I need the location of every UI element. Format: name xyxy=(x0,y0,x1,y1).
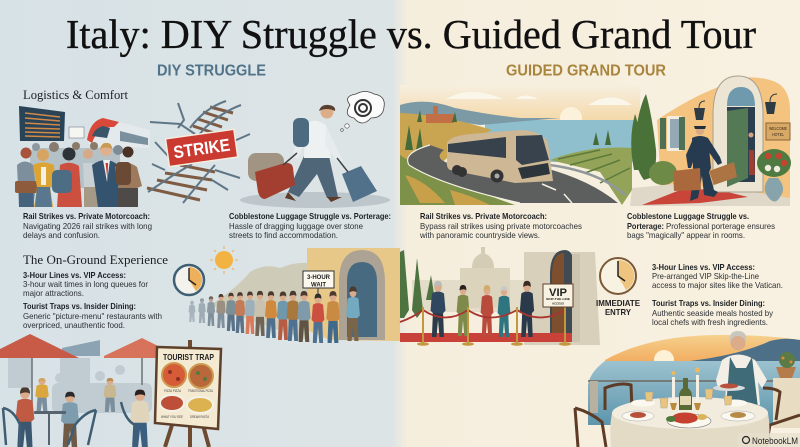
cafe ghost background xyxy=(8,358,152,413)
text block: lines (DIY) xyxy=(23,271,148,298)
text block: lines (DIY): 3-hour wait times in long queues for xyxy=(23,280,148,289)
red carpet xyxy=(642,189,748,205)
food photos xyxy=(160,363,213,413)
cypress trees xyxy=(400,250,435,318)
sign: VIP xyxy=(543,284,573,307)
text block: lines (DIY): major attractions. xyxy=(23,289,84,298)
cafe chairs xyxy=(3,402,135,445)
text block: dining (DIY): Tourist Traps vs. Insider Dining: xyxy=(23,302,136,311)
text block: luggage (DIY): streets to find accommodation. xyxy=(229,231,338,240)
text block: luggage (guided): Cobblestone Luggage Struggle vs. xyxy=(627,212,749,221)
illustration: coach on coastal road xyxy=(400,85,640,205)
luggage: blue suitcase xyxy=(337,158,377,202)
text block: dining (DIY) xyxy=(23,302,162,330)
sea xyxy=(485,120,635,162)
foreground golden leaves xyxy=(405,175,490,205)
umbrellas xyxy=(0,334,170,410)
heading: DIY Struggle: DIY STRUGGLE xyxy=(157,62,266,80)
text block: rail strikes (guided): Bypass rail strikes using private motorcoaches xyxy=(420,222,582,231)
basilica xyxy=(412,247,524,312)
stone entrance xyxy=(524,250,600,345)
icon: immediate entry clock xyxy=(600,258,636,294)
sign: 3-hour wait: 3-HOUR xyxy=(307,274,331,281)
terrace rail xyxy=(588,380,800,382)
background crowd xyxy=(30,142,123,188)
icon: train xyxy=(87,118,150,148)
velvet rope and stanchions xyxy=(400,307,571,346)
road xyxy=(408,145,618,203)
traveller: man in grey xyxy=(83,149,99,207)
cypress row xyxy=(405,110,611,150)
section heading: Logistics and Comfort: Logistics & Comfort xyxy=(23,88,129,102)
icon: sun xyxy=(210,246,238,274)
village xyxy=(426,106,454,123)
sea xyxy=(588,361,800,425)
thought bubble: tangled confusion xyxy=(341,92,384,131)
text block: rail strikes (guided): with panoramic countryside views. xyxy=(419,231,540,240)
coach xyxy=(447,130,553,183)
place settings xyxy=(622,400,755,421)
text block: dining (guided) xyxy=(652,299,774,327)
title: Italy: DIY Struggle vs. Guided Grand Tour xyxy=(66,11,756,57)
label: immediate entry: ENTRY xyxy=(605,307,631,317)
text block: rail strikes (guided) xyxy=(419,212,582,240)
text block: lines (DIY): 3-Hour Lines vs. VIP Access: xyxy=(23,271,126,280)
label: immediate entry xyxy=(596,298,640,317)
sign: tourist trap menu xyxy=(155,347,221,429)
planter pillar xyxy=(773,352,800,428)
arched door xyxy=(339,250,385,340)
traveller: man with brown backpack xyxy=(115,146,142,207)
NotebookLM badge xyxy=(738,433,800,447)
text block: lines (guided) xyxy=(652,263,783,290)
golden fields xyxy=(400,113,492,205)
text block: luggage (guided): Porterage: xyxy=(627,222,664,231)
traveller: man with bag xyxy=(15,148,37,207)
icon: departure board xyxy=(19,106,65,141)
cypress trees xyxy=(631,94,656,180)
vineyard hillside xyxy=(550,148,632,205)
illustration: VIP skip-the-line entry xyxy=(400,247,600,346)
text block: luggage (DIY): Hassle of dragging luggage over stone xyxy=(229,222,363,231)
traveller: woman in red with backpack xyxy=(52,148,82,207)
text block: rail strikes (guided): Rail Strikes vs. Private Motorcoach: xyxy=(420,212,547,221)
luggage: red suitcase and bag xyxy=(248,153,297,199)
paved ground xyxy=(630,184,790,206)
illustration: hotel porter xyxy=(630,76,791,206)
red carpet xyxy=(400,333,572,342)
sky sun and clouds xyxy=(446,92,632,129)
text block: luggage (DIY): Cobblestone Luggage Struggle vs. Porterage: xyxy=(229,212,391,221)
text block: luggage (guided): Professional porterage ensures xyxy=(666,222,775,231)
traveller xyxy=(285,105,343,202)
hillside xyxy=(210,263,307,340)
sign: 3-hour wait: WAIT xyxy=(311,282,326,288)
wine bottle xyxy=(679,378,692,410)
sign: tourist trap menu: PIZZA PIZZA xyxy=(164,389,182,393)
sign: welcome hotel xyxy=(766,123,790,140)
text block: lines (guided): access to major sites like the Vatican. xyxy=(652,281,783,290)
wine glasses xyxy=(645,389,732,408)
porter with suitcases xyxy=(673,126,737,201)
door arch xyxy=(713,76,763,192)
tour group xyxy=(430,281,534,337)
text block: rail strikes (DIY): Rail Strikes vs. Private Motorcoach: xyxy=(23,212,150,221)
illustration: seaside dining with chef xyxy=(575,331,800,447)
icon: wait clock xyxy=(174,265,204,295)
illustration: broken rail tracks with strike sign xyxy=(147,101,250,203)
table cloth skirt xyxy=(610,413,770,447)
peach sky xyxy=(400,85,640,123)
text block: dining (guided): Tourist Traps vs. Insider Dining: xyxy=(652,299,765,308)
sign: VIP: SKIP-THE-LINE xyxy=(546,297,570,301)
queue of people xyxy=(189,287,360,343)
candles xyxy=(670,368,701,410)
window xyxy=(660,116,685,151)
traveller: man in suit xyxy=(92,143,119,207)
section heading: The On-Ground Experience: The On-Ground Experience xyxy=(23,253,168,267)
sun xyxy=(654,350,674,370)
text block: luggage (guided): bags "magically" appear in rooms. xyxy=(627,231,745,240)
sunset sky xyxy=(605,335,800,362)
cafe table xyxy=(34,411,66,445)
chef xyxy=(713,331,767,408)
cobblestone ground xyxy=(240,192,390,208)
rails xyxy=(148,101,250,203)
sign: VIP: ACCESS xyxy=(552,302,564,306)
sign: welcome hotel: WELCOME xyxy=(769,126,787,131)
text block: rail strikes (DIY): Navigating 2026 rail strikes with long xyxy=(23,222,152,231)
seafood platter xyxy=(666,412,711,428)
sign: tourist trap menu: TOURIST TRAP xyxy=(163,352,214,362)
sign: tourist trap menu: DREAM PASTA xyxy=(190,415,210,419)
traveller: woman in yellow xyxy=(33,149,56,207)
flower vase xyxy=(757,149,791,202)
headland xyxy=(690,339,800,362)
foreground vegetation xyxy=(400,155,515,205)
easel xyxy=(165,340,209,447)
wall lanterns xyxy=(694,94,777,120)
table cloth top xyxy=(612,397,768,429)
diners xyxy=(16,378,150,447)
text block: dining (DIY): overpriced, unauthentic food. xyxy=(23,321,125,330)
text block: luggage (guided) xyxy=(627,212,775,240)
guardrail xyxy=(550,165,625,195)
icon: speech note xyxy=(69,127,84,138)
heading: Guided Grand Tour: GUIDED GRAND TOUR xyxy=(506,62,666,80)
illustration: traveller dragging luggage over cobblestones xyxy=(240,92,390,208)
building wall xyxy=(307,248,400,341)
wooden chairs xyxy=(575,384,800,447)
illustration: long queue outside a site xyxy=(189,248,400,343)
text block: dining (guided): Authentic seaside meals hosted by xyxy=(652,309,774,318)
illustration: crowded rail station xyxy=(15,106,150,207)
text block: luggage (DIY) xyxy=(229,212,391,240)
text block: lines (guided): 3-Hour Lines vs. VIP Access: xyxy=(652,263,755,272)
illustration: tourist trap cafe xyxy=(0,334,221,447)
text block: dining (DIY): Generic "picture-menu" restaurants with xyxy=(23,312,162,321)
sign: tourist trap menu: WHAT YOU SEE xyxy=(161,415,183,419)
sign: welcome hotel: HOTEL xyxy=(772,132,785,137)
text block: lines (guided): Pre-arranged VIP Skip-the-Line xyxy=(652,272,759,281)
hotel facade xyxy=(657,77,790,200)
rail sleepers xyxy=(147,107,233,200)
text block: rail strikes (DIY): delays and confusion. xyxy=(23,231,100,240)
sign: tourist trap menu: TRADITIONAL PIZZA xyxy=(188,389,214,393)
text block: rail strikes (DIY) xyxy=(23,212,152,240)
sign: strike: STRIKE xyxy=(172,135,231,162)
sign: 3-hour wait xyxy=(303,271,334,322)
label: immediate entry: IMMEDIATE xyxy=(596,298,640,308)
sign: VIP: VIP xyxy=(549,287,567,299)
shrub xyxy=(649,161,677,185)
text block: dining (guided): local chefs with fresh ingredients. xyxy=(652,318,768,327)
distant hills xyxy=(400,102,560,125)
